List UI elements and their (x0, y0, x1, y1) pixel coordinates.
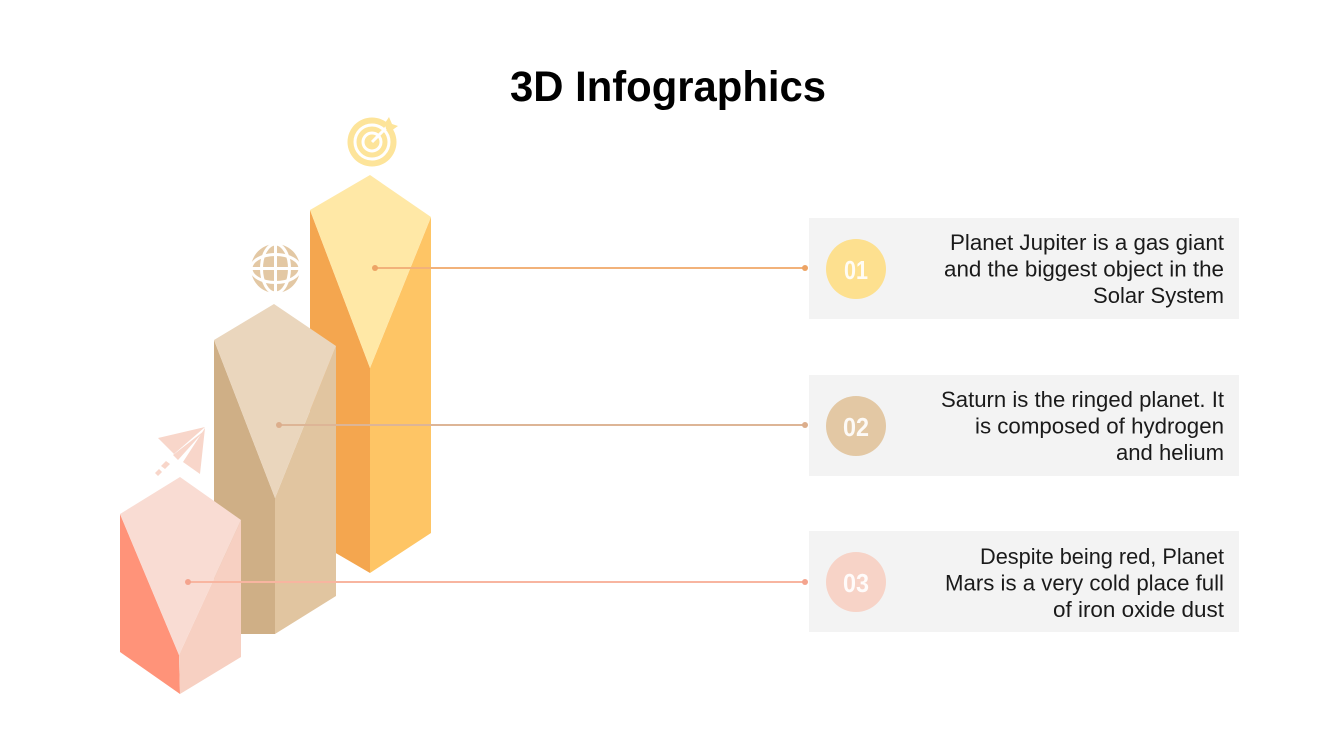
column: pink (shortest) (120, 477, 241, 694)
panel: Mars (809, 531, 1239, 632)
text: Saturn (941, 387, 1224, 465)
column: tan (middle) (214, 304, 336, 634)
connector line 2 (276, 422, 808, 428)
text: Mars: of iron oxide dust (1053, 597, 1224, 622)
text: Jupiter: Solar System (1093, 283, 1224, 308)
column: yellow (tallest) (310, 175, 431, 573)
text: Saturn: Saturn is the ringed planet. It (941, 387, 1224, 412)
text: Mars (945, 544, 1224, 622)
number badge 02 (826, 396, 886, 456)
number badge 01 (826, 239, 886, 299)
panel: Saturn (809, 375, 1239, 476)
text: Mars: Despite being red, Planet (980, 544, 1224, 569)
text: Jupiter: Planet Jupiter is a gas giant (950, 230, 1224, 255)
connector line 1 (372, 265, 808, 271)
number badge 03 (826, 552, 886, 612)
connector line 3 (185, 579, 808, 585)
icon: paper plane (155, 427, 205, 476)
text: Jupiter (944, 230, 1224, 308)
number badge 01: 01 (844, 255, 868, 285)
text: Mars: Mars is a very cold place full (945, 570, 1224, 596)
number badge 03: 03 (843, 568, 869, 598)
icon: globe (251, 244, 300, 293)
icon: target (348, 117, 398, 166)
number badge 02: 02 (843, 412, 869, 442)
text: Jupiter: and the biggest object in the (944, 256, 1224, 282)
title: 3D Infographics (510, 63, 826, 111)
text: Saturn: and helium (1116, 440, 1224, 465)
text: Saturn: is composed of hydrogen (975, 414, 1224, 438)
panel: Jupiter (809, 218, 1239, 319)
